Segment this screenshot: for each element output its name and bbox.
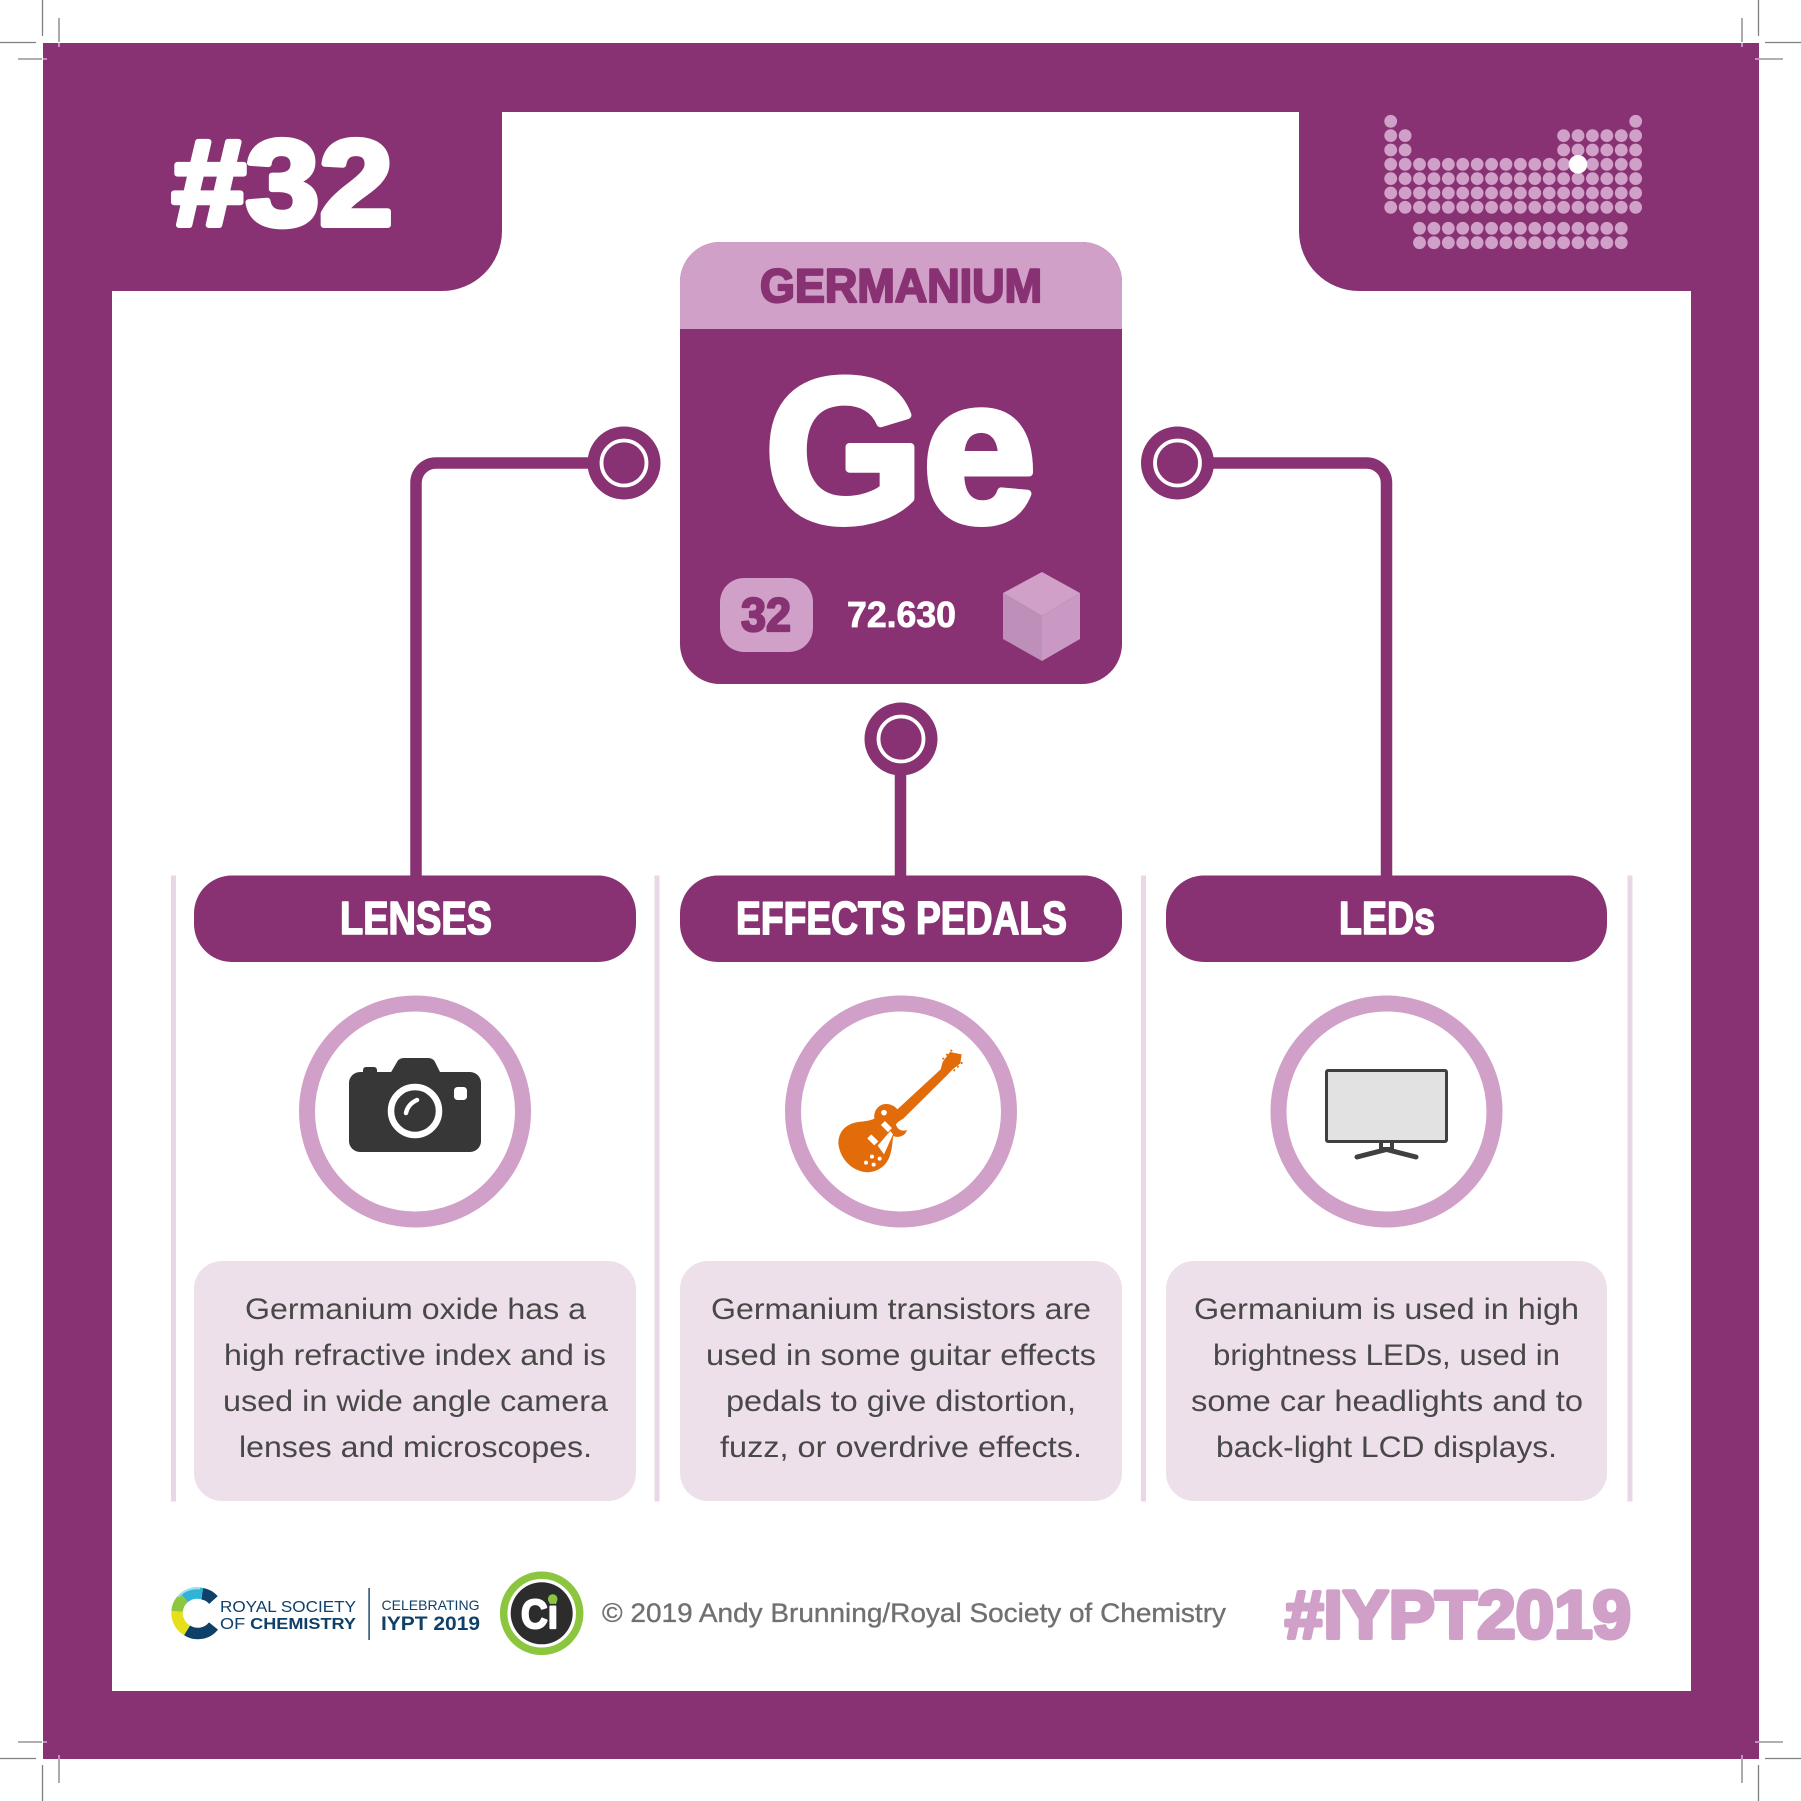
icon: RSC ring (177, 1588, 214, 1634)
heading pill: lenses (194, 876, 636, 962)
text box: LEDs: back-light LCD displays. (1216, 1431, 1557, 1464)
copyright: © 2019 Andy Brunning/Royal Society of Chemistry (602, 1598, 1227, 1628)
atomic number badge: 32 (741, 588, 791, 641)
icon: periodic table locator (1391, 121, 1636, 243)
text box: effects pedals: used in some guitar effects (706, 1339, 1096, 1372)
connector node: centre (864, 702, 938, 776)
heading pill: lenses: LENSES (340, 892, 492, 944)
element name: GERMANIUM (760, 259, 1042, 312)
logo: Royal Society of Chemistry: IYPT 2019 (381, 1613, 480, 1635)
logo: Royal Society of Chemistry: CELEBRATING (382, 1597, 480, 1613)
connector: centre line to effects pedals (895, 739, 906, 876)
hashtag: #IYPT2019 (1285, 1577, 1631, 1653)
icon: monitor (1278, 1004, 1494, 1220)
text box: lenses (194, 1261, 636, 1501)
panel: element card (680, 242, 1122, 684)
text box: lenses: lenses and microscopes. (239, 1431, 592, 1464)
logo: Royal Society of Chemistry: OF CHEMISTRY (220, 1616, 356, 1633)
text box: lenses: Germanium oxide has a (245, 1293, 586, 1326)
text box: LEDs: brightness LEDs, used in (1213, 1339, 1560, 1372)
logo: Compound Interest: Ci (521, 1591, 558, 1637)
atomic number badge (720, 578, 813, 652)
panel: lenses (194, 876, 636, 1501)
heading pill: effects pedals: EFFECTS PEDALS (736, 892, 1067, 944)
text box: lenses: high refractive index and is (224, 1339, 606, 1372)
text box: effects pedals: fuzz, or overdrive effects. (720, 1431, 1082, 1464)
icon: guitar (793, 1004, 1009, 1220)
heading pill: LEDs (1166, 876, 1607, 962)
text box: LEDs (1166, 1261, 1607, 1501)
connector: right line to LEDs (1177, 463, 1386, 876)
text box: effects pedals (680, 1261, 1122, 1501)
text box: effects pedals: pedals to give distortion, (726, 1385, 1076, 1418)
element symbol: Ge (765, 337, 1036, 565)
connector node: right (1141, 426, 1214, 500)
heading pill: effects pedals (680, 876, 1122, 962)
connector node: left (588, 426, 660, 500)
logo: Royal Society of Chemistry: ROYAL SOCIETY (220, 1599, 356, 1616)
element number heading: #32 (172, 115, 393, 251)
column separators (171, 876, 1632, 1502)
heading pill: LEDs: LEDs (1339, 892, 1435, 944)
text box: LEDs: some car headlights and to (1191, 1385, 1583, 1418)
connector: left line to lenses (416, 463, 624, 876)
icon: crystal cube (1003, 572, 1080, 661)
text box: lenses: used in wide angle camera (223, 1385, 608, 1418)
text box: LEDs: Germanium is used in high (1194, 1293, 1579, 1326)
panel: effects pedals (680, 876, 1122, 1501)
logo: Compound Interest (504, 1575, 580, 1651)
icon: camera (307, 1004, 523, 1220)
atomic mass: 72.630 (847, 594, 956, 635)
logo: Royal Society of Chemistry (177, 1588, 480, 1640)
panel: LEDs (1166, 876, 1607, 1501)
text box: effects pedals: Germanium transistors are (711, 1293, 1091, 1326)
